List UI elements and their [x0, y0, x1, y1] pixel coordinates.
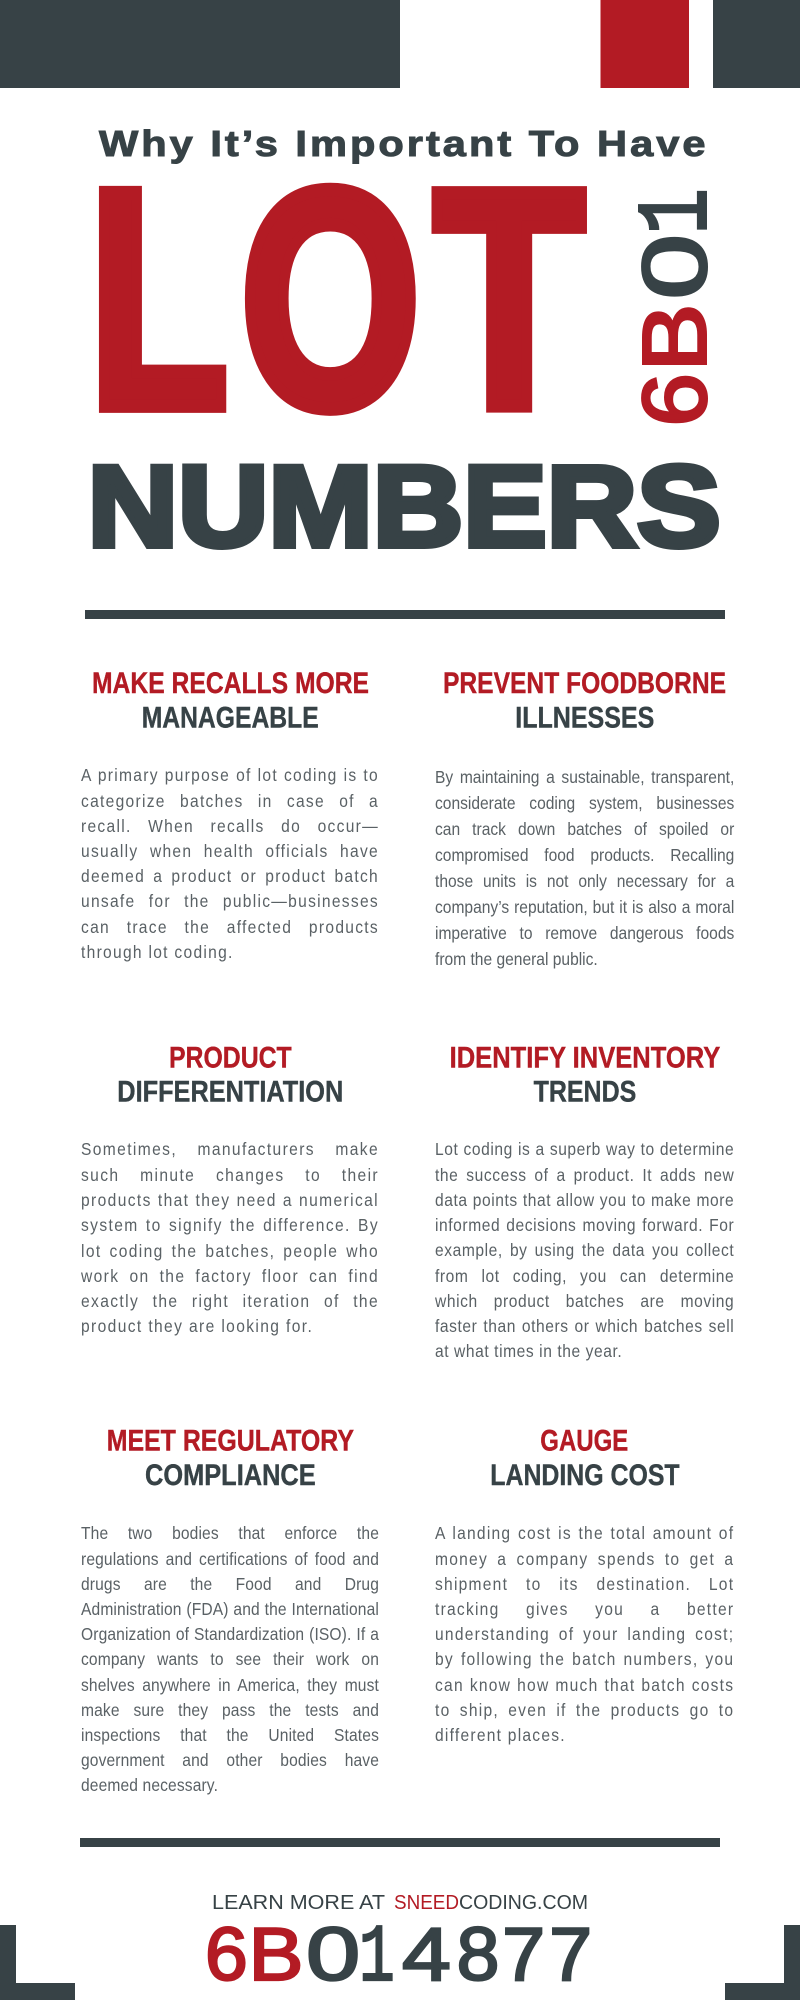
body text: which product batches are moving	[435, 1291, 734, 1311]
body text: understanding of your landing cost;	[435, 1624, 734, 1644]
body text: make sure they pass the tests and	[81, 1700, 379, 1720]
footer code 6B014877: 8	[457, 1912, 500, 1996]
footer code 6B014877: 7	[502, 1912, 545, 1996]
title: NUMBERS: NUMBERS	[88, 443, 721, 571]
body text: money a company spends to get a	[435, 1549, 734, 1569]
footer code 6B014877: B	[248, 1912, 304, 1996]
heading: MEET REGULATORY	[107, 1425, 354, 1458]
rotated code 6B01: 6	[626, 373, 726, 426]
body text: company wants to see their work on	[81, 1649, 379, 1669]
body text: deemed a product or product batch	[81, 866, 379, 886]
body text: inspections that the United States	[81, 1725, 379, 1745]
body text: products that they need a numerical	[81, 1190, 379, 1210]
footer code 6B014877: 0	[306, 1912, 360, 1996]
body text: The two bodies that enforce the	[81, 1523, 379, 1543]
body text: categorize batches in case of a	[81, 791, 379, 811]
body text	[81, 1139, 379, 1336]
body text: shelves anywhere in America, they must	[81, 1675, 379, 1695]
body text: shipment to its destination. Lot	[435, 1574, 734, 1594]
footer call to action: SNEED	[394, 1892, 459, 1914]
body text: recall. When recalls do occur—	[81, 816, 379, 836]
body text: informed decisions moving forward. For	[435, 1215, 734, 1235]
body text: those units is not only necessary for a	[435, 871, 734, 891]
footer call to action: CODING.COM	[459, 1892, 588, 1914]
panel: prevent foodborne illnesses	[435, 667, 734, 969]
heading	[107, 1425, 354, 1492]
body text: by following the batch numbers, you	[435, 1649, 734, 1669]
body text: Lot coding is a superb way to determine	[435, 1139, 734, 1159]
heading: PRODUCT	[169, 1042, 292, 1075]
heading	[490, 1425, 680, 1492]
heading	[117, 1042, 343, 1109]
panel: make recalls more manageable	[81, 667, 379, 962]
body text: tracking gives you a better	[435, 1599, 734, 1619]
body text: Sometimes, manufacturers make	[81, 1139, 379, 1159]
body text: usually when health officials have	[81, 841, 379, 861]
body text: considerate coding system, businesses	[435, 793, 734, 813]
top divider rule	[85, 610, 725, 619]
body text: Administration (FDA) and the International	[81, 1599, 379, 1619]
body text: imperative to remove dangerous foods	[435, 923, 734, 943]
body text: compromised food products. Recalling	[435, 845, 734, 865]
title: LOT: L	[89, 125, 228, 472]
body text: exactly the right iteration of the	[81, 1291, 379, 1311]
top right dark bar	[713, 0, 800, 88]
body text: from the general public.	[435, 949, 597, 969]
footer code 6B014877: 6	[205, 1912, 248, 1996]
body text: Organization of Standardization (ISO). If a	[81, 1624, 379, 1644]
body text: system to signify the difference. By	[81, 1215, 379, 1235]
panel: identify inventory trends	[435, 1042, 734, 1361]
body text: regulations and certifications of food and	[81, 1549, 379, 1569]
body text	[81, 1523, 379, 1795]
panel: gauge landing cost	[435, 1425, 734, 1745]
rotated code 6B01: 0	[626, 234, 726, 299]
body text: data points that allow you to make more	[435, 1190, 734, 1210]
rotated code 6B01: 1	[624, 188, 736, 234]
footer call to action: LEARN MORE AT	[212, 1892, 385, 1914]
heading: DIFFERENTIATION	[117, 1076, 343, 1109]
heading: PREVENT FOODBORNE	[443, 667, 726, 700]
bottom left corner bracket	[0, 1925, 75, 2000]
body text: By maintaining a sustainable, transparent,	[435, 767, 734, 787]
heading: LANDING COST	[490, 1459, 679, 1492]
body text	[435, 1139, 734, 1361]
panel: product differentiation	[81, 1042, 379, 1336]
body text: through lot coding.	[81, 942, 234, 962]
body text: faster than others or which batches sell	[435, 1316, 734, 1336]
body text: such minute changes to their	[81, 1165, 379, 1185]
heading: COMPLIANCE	[145, 1459, 316, 1492]
body text: from lot coding, you can determine	[435, 1266, 734, 1286]
bottom divider rule	[80, 1838, 720, 1847]
footer code 6B014877: 4	[402, 1912, 451, 1996]
body text: A primary purpose of lot coding is to	[81, 765, 379, 785]
heading	[449, 1042, 720, 1109]
body text: the success of a product. It adds new	[435, 1165, 734, 1185]
heading: MANAGEABLE	[142, 702, 319, 735]
body text: at what times in the year.	[435, 1341, 622, 1361]
body text: government and other bodies have	[81, 1750, 379, 1770]
body text: work on the factory floor can find	[81, 1266, 379, 1286]
body text: example, by using the data you collect	[435, 1240, 734, 1260]
heading: MAKE RECALLS MORE	[92, 667, 369, 700]
body text: can track down batches of spoiled or	[435, 819, 734, 839]
heading	[92, 667, 369, 735]
title: LOT: T	[434, 127, 584, 472]
rotated code 6B01	[624, 188, 736, 426]
body text	[435, 1523, 734, 1745]
body text: A landing cost is the total amount of	[435, 1523, 734, 1543]
heading: TRENDS	[533, 1076, 636, 1109]
body text	[435, 767, 734, 969]
body text: deemed necessary.	[81, 1775, 218, 1795]
body text: drugs are the Food and Drug	[81, 1574, 379, 1594]
heading	[443, 667, 726, 735]
rotated code 6B01: B	[626, 304, 726, 372]
body text: can know how much that batch costs	[435, 1675, 734, 1695]
body text	[81, 765, 379, 962]
footer call to action	[212, 1892, 588, 1914]
heading: IDENTIFY INVENTORY	[449, 1042, 720, 1075]
body text: lot coding the batches, people who	[81, 1241, 379, 1261]
footer code 6B014877	[205, 1912, 592, 2000]
body text: unsafe for the public—businesses	[81, 891, 379, 911]
title: why it's important to have: Why It’s Important To Have	[99, 124, 705, 164]
footer code 6B014877: 7	[549, 1912, 592, 1996]
title: LOT: O	[240, 125, 420, 472]
body text: different places.	[435, 1725, 566, 1745]
body text: company’s reputation, but it is also a moral	[435, 897, 734, 917]
title: LOT	[89, 125, 584, 472]
top left dark bar	[0, 0, 400, 88]
body text: product they are looking for.	[81, 1316, 313, 1336]
heading: GAUGE	[540, 1425, 628, 1458]
top red square	[600, 0, 689, 88]
body text: can trace the affected products	[81, 917, 379, 937]
body text: to ship, even if the products go to	[435, 1700, 734, 1720]
bottom right corner bracket	[725, 1925, 800, 2000]
panel: meet regulatory compliance	[81, 1425, 379, 1795]
heading: ILLNESSES	[515, 702, 654, 735]
